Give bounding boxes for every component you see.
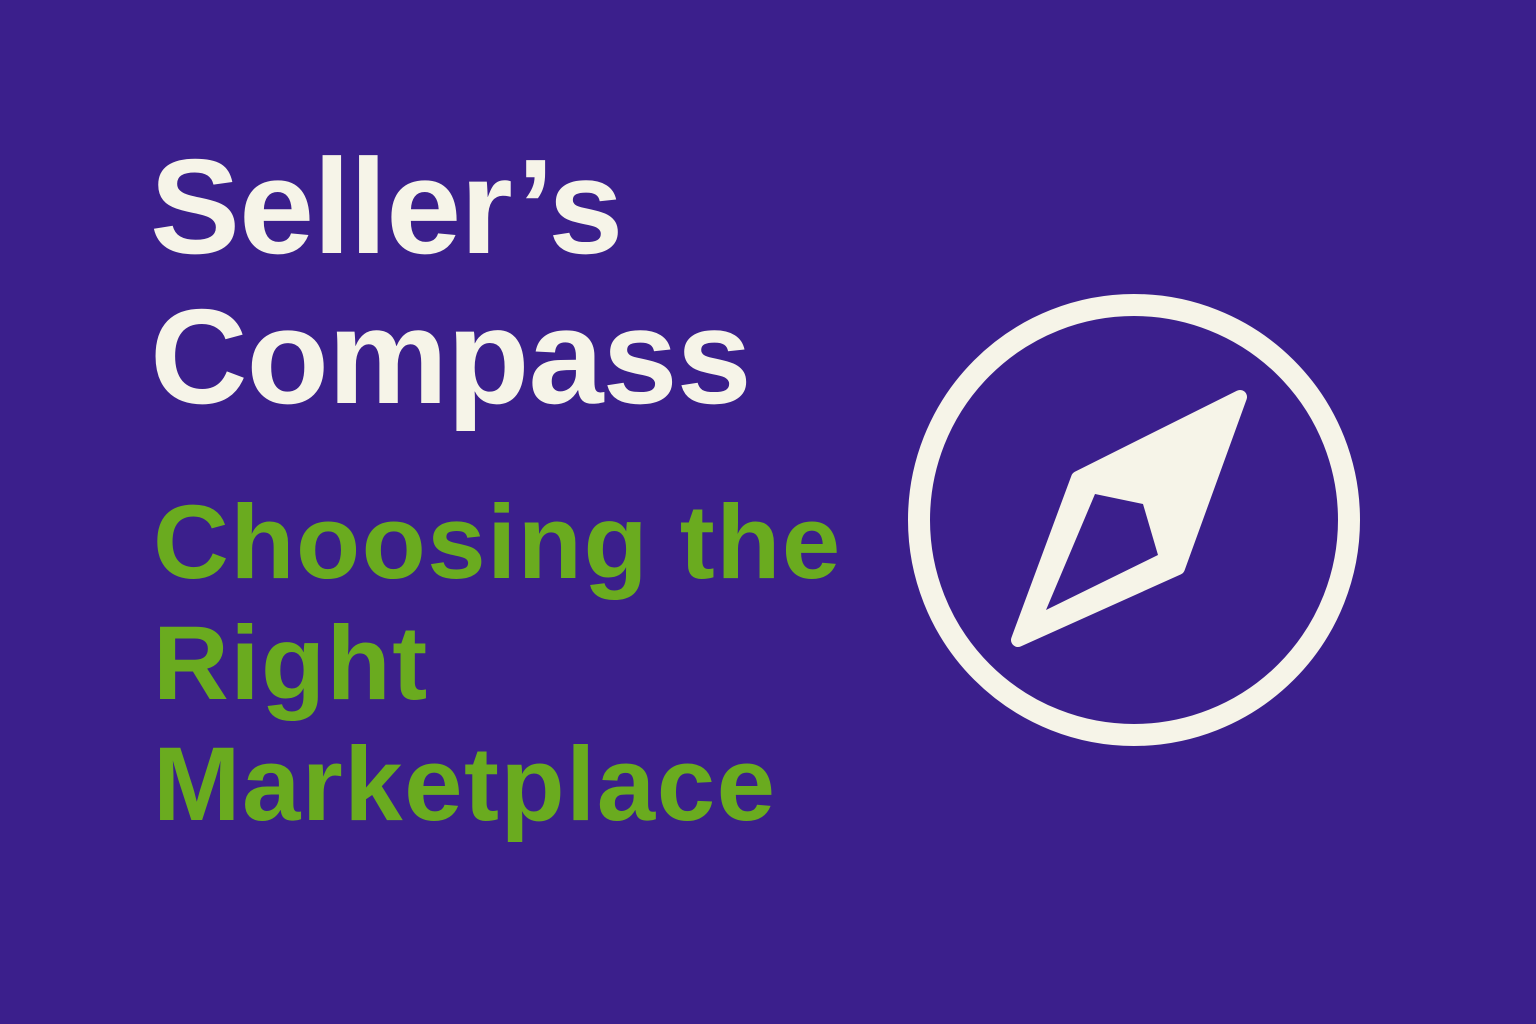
subtitle [153,484,842,843]
title [150,131,751,432]
subtitle: Choosing the [153,484,842,601]
title: Compass [150,281,751,432]
subtitle: Marketplace [153,726,776,843]
subtitle: Right [153,605,429,722]
title: Seller’s [150,131,622,282]
